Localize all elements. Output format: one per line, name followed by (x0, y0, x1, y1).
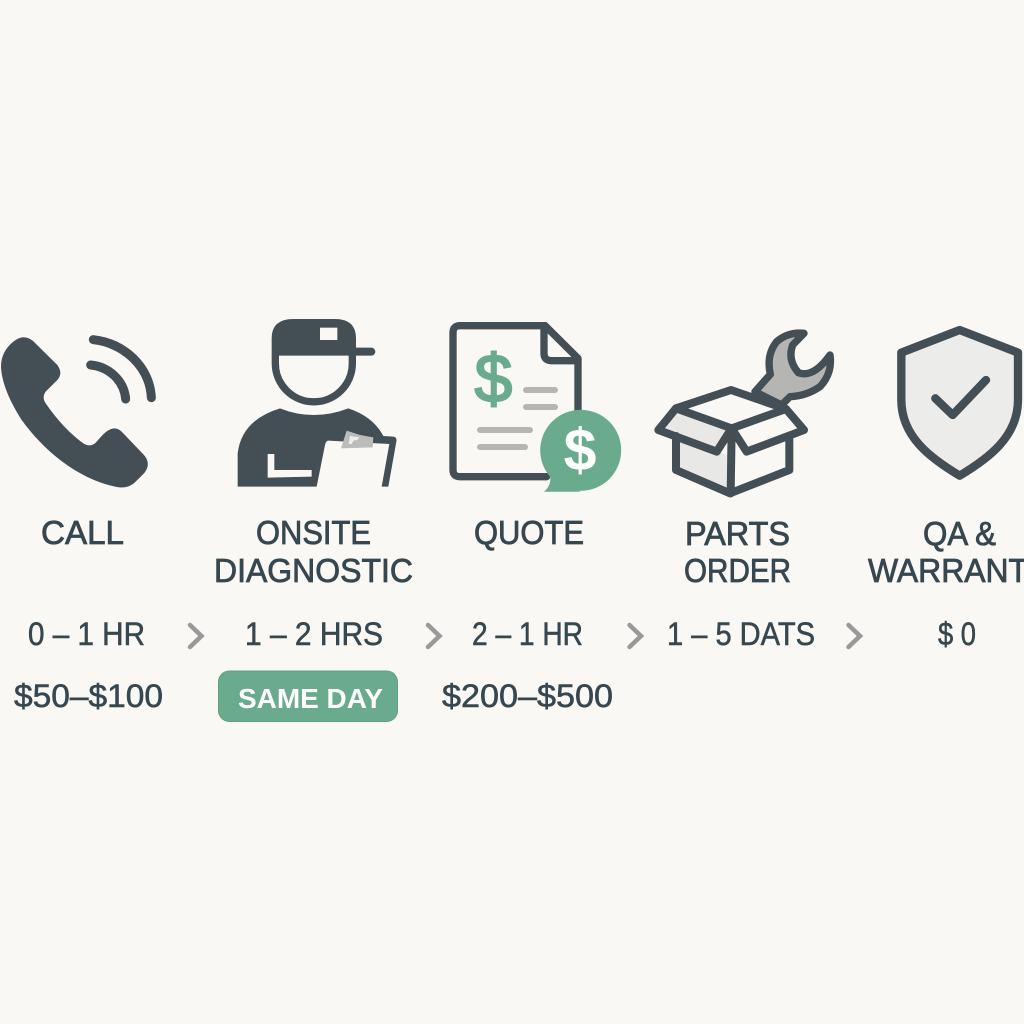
label: quote: QUOTE (474, 514, 584, 551)
label: onsite diagnostic: ONSITE (256, 514, 371, 551)
arrow: onsite diagnostic to quote (428, 625, 440, 647)
arrow: call to onsite diagnostic (190, 625, 202, 647)
label: parts order: ORDER (684, 552, 791, 589)
icon: phone with signal arcs (1, 337, 151, 488)
step: parts order (658, 333, 830, 652)
dollar speech bubble (540, 410, 621, 492)
label: qa and warranty (868, 515, 1024, 589)
icon: technician with clipboard (238, 319, 397, 487)
badge: same day (218, 671, 398, 722)
cost: qa and warranty: $ 0 (938, 616, 976, 652)
icon: open box with wrench (658, 333, 830, 493)
label: call: CALL (41, 514, 124, 551)
time: onsite diagnostic: 1 – 2 HRS (245, 616, 383, 652)
green dollar sign: $ (474, 341, 512, 417)
dollar speech bubble: $ (564, 417, 596, 483)
text lines (480, 390, 555, 447)
label: onsite diagnostic: DIAGNOSTIC (214, 552, 413, 589)
arrow: parts order to warranty (848, 625, 860, 647)
icon: shield with check (901, 330, 1018, 476)
label: qa and warranty: QA & (923, 515, 996, 552)
label: parts order: PARTS (685, 515, 790, 552)
step: qa and warranty (868, 330, 1024, 652)
time: quote: 2 – 1 HR (472, 616, 583, 652)
document outline (453, 326, 578, 477)
step: onsite diagnostic (214, 319, 413, 722)
cost: quote: $200–$500 (442, 678, 613, 714)
arrow: quote to parts order (630, 625, 641, 647)
time: parts order: 1 – 5 DATS (667, 616, 815, 652)
label: parts order (684, 515, 791, 589)
label: onsite diagnostic (214, 514, 413, 589)
badge: same day: SAME DAY (238, 683, 383, 714)
time: call: 0 – 1 HR (28, 616, 145, 652)
step: quote (442, 326, 621, 714)
cost: call: $50–$100 (14, 678, 163, 714)
icon: quote document with dollar bubble (453, 326, 621, 492)
step: call (1, 337, 163, 714)
